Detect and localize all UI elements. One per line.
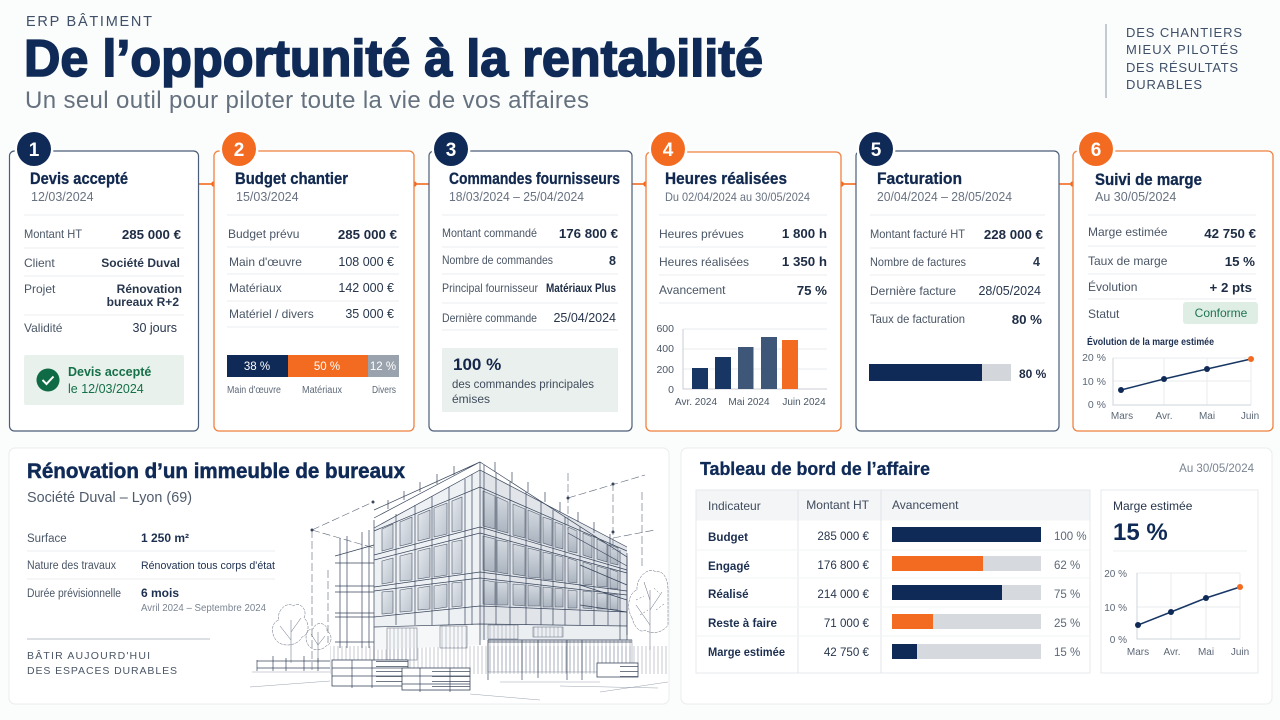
project slogan [27, 649, 177, 677]
row: marge estimée [708, 644, 1080, 659]
panel: step 2 budget chantier [214, 130, 414, 431]
line chart: marge [1082, 352, 1259, 422]
data rows [870, 227, 1044, 327]
project facts [27, 531, 275, 614]
data rows: 80 % [1012, 312, 1042, 327]
data rows: 228 000 € [984, 227, 1044, 242]
data rows: 28/05/2024 [978, 284, 1041, 298]
KPI label: Marge estimée [1113, 499, 1193, 513]
tagline: DES CHANTIERS [1126, 25, 1242, 40]
callout: 100 % des commandes: 100 % [453, 355, 501, 374]
data rows: Heures réalisées [659, 255, 749, 269]
data rows: Matériaux Plus [546, 283, 616, 295]
row: budget: 285 000 € [817, 530, 870, 543]
icon: step number 3 [432, 130, 470, 168]
data rows: Montant facturé HT [870, 227, 966, 241]
KPI value: 15 % [1113, 519, 1168, 546]
panel: step 4 heures réalisées [646, 130, 841, 431]
icon: step number 2 [220, 130, 258, 168]
connector arrows between steps [198, 182, 1075, 186]
heading: Facturation [877, 170, 962, 188]
title: De l’opportunité à la rentabilité [24, 30, 763, 88]
data rows: Client [24, 256, 55, 270]
panel: marge estimée KPI [1101, 490, 1258, 673]
data rows: 35 000 € [345, 307, 394, 321]
progress bar: facturation [869, 364, 1047, 381]
row: engagé: 62 % [1054, 560, 1080, 572]
data table [696, 490, 1090, 673]
subtitle: Un seul outil pour piloter toute la vie de vos affaires [25, 87, 589, 114]
bar chart: heures [656, 323, 827, 408]
row: marge estimée: Marge estimée [708, 646, 786, 659]
data rows: Projet [24, 282, 56, 296]
data rows: 176 800 € [559, 226, 619, 241]
line chart: marge estimée: 10 % [1104, 603, 1127, 614]
illustration: building under construction sketch [250, 462, 668, 700]
row: réalisé: 75 % [1054, 589, 1080, 601]
icon: step number 4 [648, 130, 688, 168]
line chart: marge: 0 % [1088, 399, 1106, 411]
guide lines [312, 473, 655, 673]
chart heading: Évolution de la marge estimée [1087, 335, 1214, 348]
project facts: Durée prévisionnelle [27, 588, 121, 600]
row: budget: Budget [708, 531, 748, 544]
tagline [1106, 24, 1242, 98]
table header: Montant HT [806, 498, 870, 512]
heading: Heures réalisées [665, 170, 787, 188]
windows right face [483, 491, 618, 610]
panel: tableau de bord [681, 448, 1272, 704]
table header: Avancement [892, 498, 959, 512]
project facts: 6 mois [141, 586, 179, 600]
data rows: Taux de marge [1088, 254, 1168, 268]
row: engagé: Engagé [708, 560, 750, 573]
data rows: Rénovation [117, 282, 182, 296]
row: réalisé [708, 585, 1080, 601]
data rows: Marge estimée [1088, 225, 1168, 239]
bar chart: heures: 0 [668, 384, 674, 396]
row: budget [708, 527, 1087, 544]
data rows: 4 [1033, 255, 1040, 269]
data rows: 15 % [1225, 254, 1255, 269]
icon: step number 1 [14, 130, 54, 168]
stacked bar: budget: 38 % [244, 361, 270, 373]
callout: 100 % des commandes: émises [452, 392, 490, 406]
data rows: Montant HT [24, 227, 83, 241]
low wall [488, 640, 632, 680]
panel: step 3 commandes fournisseurs [429, 130, 632, 431]
data rows: Dernière commande [442, 311, 537, 325]
columns [374, 462, 627, 660]
table header [708, 498, 959, 513]
date: 12/03/2024 [31, 190, 94, 204]
line chart: marge estimée: Mai [1198, 647, 1214, 658]
icon: step number 1: 1 [29, 140, 40, 161]
line chart: marge: Mars [1111, 411, 1133, 422]
stacked bar: budget: Matériaux [302, 385, 342, 396]
icon: step number 6 [1076, 130, 1116, 168]
date: Du 02/04/2024 au 30/05/2024 [665, 190, 810, 204]
data rows: Statut [1088, 307, 1120, 321]
row: reste à faire: Reste à faire [708, 617, 778, 630]
line chart: marge: 20 % [1082, 352, 1106, 364]
stacked bar: budget: 50 % [314, 361, 340, 373]
dashboard date: Au 30/05/2024 [1179, 463, 1255, 475]
bar chart: heures: 400 [656, 343, 674, 355]
data rows: Principal fournisseur [442, 281, 538, 295]
date: 15/03/2024 [236, 190, 299, 204]
date: 20/04/2024 – 28/05/2024 [877, 190, 1012, 204]
icon: step number 6: 6 [1091, 140, 1101, 161]
progress bar: facturation: 80 % [1019, 367, 1047, 381]
stacked bar: budget: Divers [372, 385, 396, 396]
data rows: 108 000 € [338, 255, 394, 269]
data rows: Heures prévues [659, 227, 744, 241]
stacked bar: budget: Main d'œuvre [227, 385, 281, 396]
data rows: 285 000 € [338, 227, 398, 242]
line chart: marge: Mai [1199, 411, 1215, 422]
callout: 100 % des commandes [442, 348, 618, 412]
ground lines [250, 672, 668, 700]
data rows: Nombre de factures [870, 255, 966, 269]
callout: devis accepté: le 12/03/2024 [68, 382, 144, 396]
project slogan: BÂTIR AUJOURD'HUI [27, 649, 150, 662]
data rows: Avancement [659, 283, 726, 297]
bar chart: heures: Juin 2024 [782, 397, 826, 408]
date: Au 30/05/2024 [1095, 190, 1176, 204]
dashboard heading: Tableau de bord de l’affaire [700, 459, 930, 479]
row: marge estimée: 42 750 € [824, 646, 870, 659]
data rows: 30 jours [133, 321, 177, 335]
row: réalisé: 214 000 € [817, 588, 870, 601]
line chart: marge estimée: 20 % [1104, 569, 1127, 580]
data rows: Matériel / divers [229, 307, 314, 321]
project slogan: DES ESPACES DURABLES [27, 665, 177, 677]
bar chart: heures: Mai 2024 [728, 397, 770, 408]
data rows: 1 350 h [782, 254, 827, 269]
data rows: Montant commandé [442, 226, 537, 240]
data rows: bureaux R+2 [107, 295, 179, 309]
icon: step number 5: 5 [871, 140, 882, 161]
project facts: Rénovation tous corps d'état [141, 560, 275, 572]
data rows: Budget prévu [228, 227, 299, 241]
data rows: 1 800 h [782, 226, 827, 241]
project facts: 1 250 m² [141, 531, 189, 545]
panel: step 6 suivi de marge [1073, 130, 1273, 431]
data rows: 25/04/2024 [553, 311, 616, 325]
floor slabs [374, 470, 627, 627]
tagline: MIEUX PILOTÉS [1126, 42, 1238, 57]
bar chart: heures: 200 [656, 364, 674, 376]
data rows: + 2 pts [1210, 280, 1252, 295]
bar chart: heures: Avr. 2024 [675, 397, 717, 408]
row: reste à faire: 71 000 € [824, 617, 870, 630]
row: réalisé: Réalisé [708, 588, 749, 601]
data rows [442, 226, 619, 325]
data rows: Conforme [1195, 306, 1248, 320]
row: marge estimée: 15 % [1054, 647, 1080, 659]
project facts: Nature des travaux [27, 560, 116, 572]
panel: step 5 facturation [856, 130, 1059, 431]
project facts: Surface [27, 533, 67, 545]
data rows [659, 226, 827, 298]
line chart: marge estimée: Juin [1231, 647, 1249, 658]
heading: Budget chantier [235, 170, 349, 188]
bar chart: heures: 600 [656, 323, 674, 335]
data rows [1088, 225, 1258, 324]
line chart: marge: Avr. [1155, 411, 1173, 422]
icon: step number 3: 3 [446, 140, 456, 161]
callout: devis accepté: Devis accepté [68, 365, 151, 379]
row: engagé: 176 800 € [817, 559, 870, 572]
heading: Devis accepté [30, 170, 128, 188]
windows left face [382, 497, 462, 614]
data rows: Société Duval [101, 256, 180, 270]
line chart: marge estimée: 0 % [1110, 635, 1127, 646]
icon: step number 2: 2 [234, 140, 244, 161]
row: reste à faire [708, 614, 1080, 630]
data rows: 75 % [797, 283, 827, 298]
callout: devis accepté [24, 355, 184, 405]
data rows: Validité [24, 321, 63, 335]
ground floor openings [387, 625, 563, 660]
data rows: Nombre de commandes [442, 253, 553, 267]
data rows: 142 000 € [338, 281, 394, 295]
line chart: marge estimée [1104, 569, 1249, 658]
callout: 100 % des commandes: des commandes principales [452, 377, 594, 391]
row: budget: 100 % [1054, 531, 1087, 543]
project subheading: Société Duval – Lyon (69) [27, 489, 192, 506]
row: engagé [708, 556, 1080, 573]
line chart: marge estimée: Mars [1127, 647, 1149, 658]
tree left [272, 605, 331, 663]
line chart: marge: Juin [1241, 411, 1259, 422]
data rows: Évolution [1088, 279, 1137, 294]
eyebrow: ERP Bâtiment: ERP BÂTIMENT [26, 13, 152, 30]
icon: step number 5 [856, 130, 896, 168]
tagline: DURABLES [1126, 77, 1202, 92]
data rows: 42 750 € [1204, 226, 1257, 241]
tree right [629, 570, 668, 650]
date: 18/03/2024 – 25/04/2024 [449, 190, 584, 204]
data rows: Dernière facture [870, 284, 956, 298]
scaffolding [335, 462, 627, 648]
material pallets [332, 660, 638, 692]
heading: Suivi de marge [1095, 171, 1202, 189]
row: reste à faire: 25 % [1054, 618, 1080, 630]
table header: Indicateur [708, 499, 761, 513]
data rows: 285 000 € [122, 227, 182, 242]
fence [257, 646, 668, 674]
data rows: 8 [609, 254, 616, 268]
heading: Commandes fournisseurs [449, 170, 620, 188]
tagline: DES RÉSULTATS [1126, 60, 1238, 75]
stacked bar: budget [227, 355, 399, 396]
project heading: Rénovation d’un immeuble de bureaux [27, 459, 405, 483]
project facts: Avril 2024 – Septembre 2024 [141, 603, 266, 614]
panel: step 1 devis accepté [10, 130, 198, 431]
line chart: marge: 10 % [1082, 376, 1106, 388]
stacked bar: budget: 12 % [370, 361, 396, 373]
data rows [228, 227, 398, 321]
icon: step number 4: 4 [663, 140, 674, 161]
building faces [374, 470, 480, 627]
data rows: Taux de facturation [870, 312, 965, 326]
data rows: Matériaux [229, 281, 282, 295]
data rows: Main d'œuvre [229, 255, 302, 269]
data rows [24, 227, 182, 335]
panel: projet rénovation [9, 448, 669, 704]
line chart: marge estimée: Avr. [1163, 647, 1181, 658]
